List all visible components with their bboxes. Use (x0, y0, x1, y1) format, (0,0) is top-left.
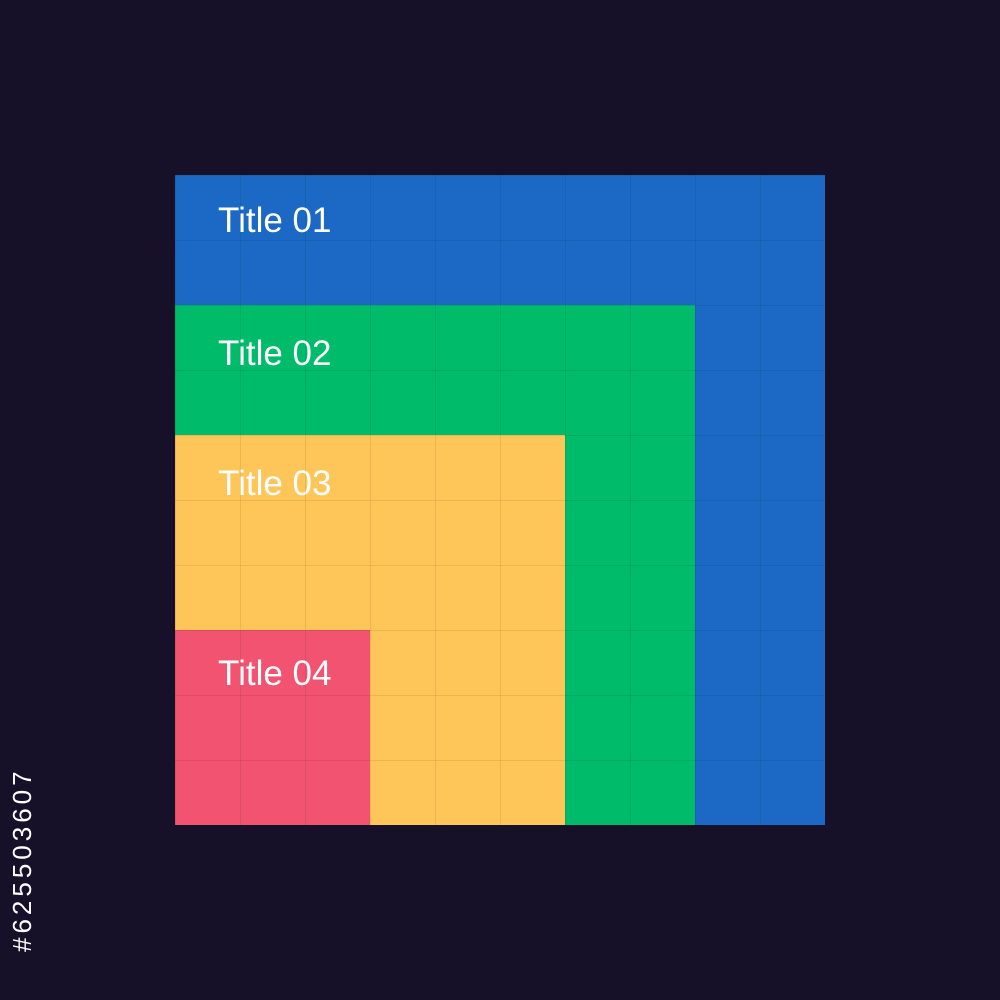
label: Title 01: Title 01 (218, 201, 331, 240)
panel: red block Title 04 (175, 630, 370, 825)
label: Title 03: Title 03 (218, 464, 331, 503)
label: Title 02: Title 02 (218, 334, 331, 373)
panel: yellow block Title 03 (175, 435, 565, 825)
stock id vertical text: #625503607 (7, 767, 37, 952)
label: Title 04: Title 04 (218, 654, 331, 693)
panel: blue block Title 01 (175, 175, 825, 825)
panel: green block Title 02 (175, 305, 695, 825)
